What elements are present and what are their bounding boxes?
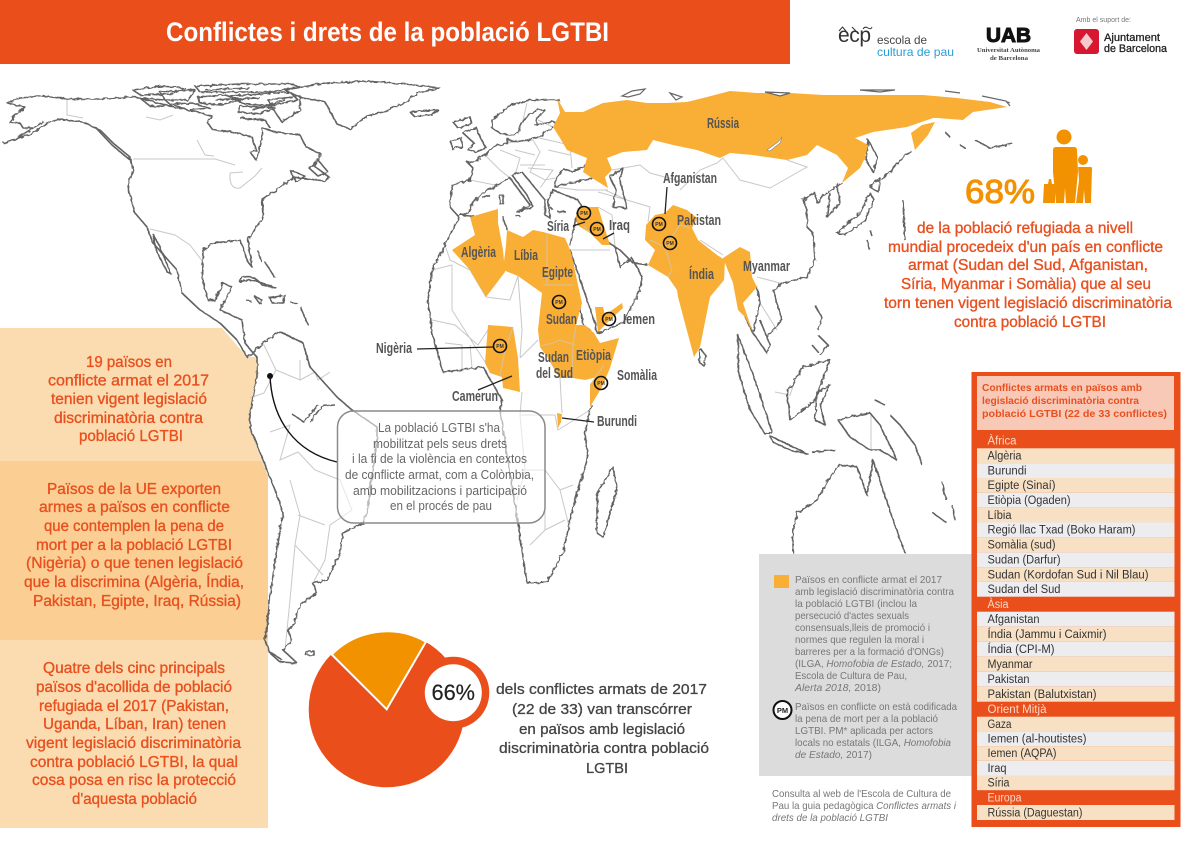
Greenland <box>285 81 440 129</box>
country labels: Sudan <box>546 312 577 328</box>
panel: conflicts table <box>972 372 1180 827</box>
death penalty markers: PM <box>593 227 601 233</box>
table section: Asia: Afganistan <box>988 614 1040 626</box>
legend text: death penalty: Països en conflicte on està codificada <box>795 701 957 713</box>
country: Myanmar <box>723 247 757 333</box>
Pacific coast islands <box>96 128 264 215</box>
panel: 19 countries <box>0 328 262 461</box>
Madagascar <box>597 467 617 537</box>
table section: Europe: Rússia (Daguestan) <box>988 808 1083 820</box>
logo: UAB: Universitat Autònoma <box>977 47 1041 54</box>
logo: UAB <box>977 25 1041 62</box>
legend text: death penalty: locals no estatals (ILGA, Homofobia <box>795 737 951 749</box>
legend <box>759 554 972 776</box>
panel: EU arms exports: armes a països en conflicte <box>39 499 230 516</box>
Caribbean islands <box>240 251 308 325</box>
stat: 68% refugees: Síria, Myanmar i Somàlia) que al seu <box>901 276 1151 293</box>
country labels: Camerun <box>452 389 498 405</box>
legend swatch: conflict countries <box>774 575 789 588</box>
panel: refugee host countries: països d'acollida de població <box>36 679 232 696</box>
country labels: Afganistan <box>663 171 717 187</box>
stat: 68% refugees: 68% <box>965 173 1035 210</box>
country labels: Nigèria <box>376 341 413 357</box>
country: Yemen <box>595 303 623 332</box>
country: Syria and Iraq <box>576 207 610 245</box>
text: share of armed conflicts: dels conflictes armats de 2017 <box>496 681 707 698</box>
country: Libya, Egypt, Sudan, South Sudan, Ethiopia, Somalia <box>503 230 619 407</box>
table section: Africa: Sudan (Kordofan Sud i Nil Blau) <box>988 569 1149 581</box>
country labels: Iraq <box>609 218 630 234</box>
Borneo <box>787 360 830 420</box>
table heading: legislació discriminatòria contra <box>982 395 1139 407</box>
panel: 19 countries: tenien vigent legislació <box>51 391 207 408</box>
stat: 68% refugees: mundial procedeix d'un país en conflicte <box>888 239 1163 256</box>
Asia east coast <box>742 183 842 353</box>
panel: EU arms exports: que la discrimina (Algèria, Índia, <box>24 574 244 591</box>
stat: 68% refugees: de la població refugiada a nivell <box>917 220 1133 237</box>
table heading: Conflictes armats en països amb <box>982 382 1142 394</box>
Pacific islands <box>875 400 955 523</box>
Lake Baikal <box>767 137 782 151</box>
panel: 19 countries: conflicte armat el 2017 <box>48 372 209 390</box>
country labels: Líbia <box>514 248 539 264</box>
table section: Middle East <box>977 704 1174 790</box>
country labels: Etiòpia <box>576 348 612 364</box>
legend text: conflict countries: normes que regulen la moral i <box>795 634 924 646</box>
Philippines <box>812 305 828 355</box>
logo: Escola de Cultura de Pau: escola de <box>877 33 927 47</box>
legend icon: PM: PM <box>777 706 788 715</box>
text: share of armed conflicts: LGTBI <box>586 760 628 777</box>
table section: Africa: Etiòpia (Ogaden) <box>988 495 1071 507</box>
table heading <box>977 376 1174 430</box>
Iceland <box>453 117 472 128</box>
callout: LGTBI mobilisation: amb mobilitzacions i participació <box>353 484 527 498</box>
Russian Arctic islands <box>622 89 1010 106</box>
panel: refugee host countries: refugiada el 2017 (Pakistan, <box>39 698 229 715</box>
table section: Asia: Myanmar <box>988 659 1033 671</box>
table section: Europe <box>977 792 1174 820</box>
legend text: conflict countries: consensuals,lleis de promoció i <box>795 622 930 634</box>
table section: Africa: Egipte (Sinaí) <box>988 480 1056 492</box>
map coastlines <box>4 81 1012 663</box>
panel: refugee host countries: Uganda, Líban, Iran) tenen <box>43 716 226 733</box>
table section: Africa: Àfrica <box>988 434 1017 448</box>
table section: Asia: Pakistan (Balutxistan) <box>988 689 1097 701</box>
callout: LGTBI mobilisation <box>338 411 545 523</box>
New Guinea <box>838 413 897 460</box>
Sumatra <box>738 335 772 434</box>
panel: EU arms exports <box>0 461 268 640</box>
Japan and Sakhalin <box>837 140 880 235</box>
Australia <box>792 460 905 553</box>
table section: Africa <box>977 434 1174 597</box>
death penalty markers: PM <box>666 241 674 247</box>
logo: Ajuntament de Barcelona <box>1074 17 1168 55</box>
logo: UAB: UAB <box>986 25 1031 47</box>
text: pedagogical guide note <box>772 788 957 824</box>
legend text: death penalty <box>795 701 957 761</box>
table section: Africa: Somàlia (sud) <box>988 540 1056 552</box>
Africa <box>428 215 598 583</box>
country labels: del Sud <box>536 366 573 382</box>
icon: refugee family <box>1043 130 1092 203</box>
country labels: Burundi <box>597 414 637 430</box>
death penalty markers: PM <box>655 222 663 228</box>
country labels: Iemen <box>623 312 655 328</box>
country labels: Egipte <box>542 265 573 281</box>
Baja California <box>153 234 171 274</box>
Newfoundland and east coast islands <box>290 160 328 182</box>
logo: Escola de Cultura de Pau <box>838 24 954 59</box>
panel: refugee host countries: contra població LGTBI, la qual <box>30 754 238 771</box>
Caspian Sea <box>610 168 627 208</box>
logo: Escola de Cultura de Pau: cultura de pau <box>877 45 954 59</box>
Mediterranean islands <box>483 195 566 216</box>
Black Sea <box>555 165 592 187</box>
table section: Africa: Líbia <box>988 510 1012 522</box>
pie chart: 66% <box>309 631 489 787</box>
logo: Ajuntament de Barcelona: de Barcelona <box>1104 43 1168 55</box>
country: Afghanistan, Pakistan, India <box>645 205 725 357</box>
Falkland islands <box>306 651 314 655</box>
country labels: Rússia <box>707 116 740 132</box>
table section: Middle East: Iemen (AQPA) <box>988 748 1057 760</box>
table section: Middle East: Orient Mitjà <box>988 704 1047 716</box>
panel: refugee host countries <box>0 640 268 828</box>
British Isles <box>451 127 486 152</box>
internal borders <box>500 225 690 385</box>
header banner <box>0 0 790 64</box>
country: Russia, Kamchatka <box>911 122 935 150</box>
stat: 68% refugees: contra població LGTBI <box>954 314 1106 331</box>
legend text: conflict countries: Països en conflicte armat el 2017 <box>795 574 942 586</box>
world map <box>4 81 1012 663</box>
table section: Middle East: Iraq <box>988 763 1006 775</box>
logo: Ajuntament de Barcelona: Ajuntament <box>1104 32 1160 44</box>
Sri Lanka <box>699 348 706 366</box>
table section: Asia <box>977 598 1174 702</box>
North America <box>4 96 329 357</box>
table section: Middle East: Gaza <box>988 719 1012 731</box>
country labels: Myanmar <box>743 259 790 275</box>
legend text: death penalty: LGTBI. PM* aplicada per actors <box>795 725 933 737</box>
text: share of armed conflicts: discriminatòria contra població <box>499 740 709 757</box>
legend text: conflict countries: amb legislació discriminatòria contra <box>795 586 954 598</box>
table section: Middle East: Iemen (al-houtistes) <box>988 734 1087 746</box>
death penalty markers: PM <box>580 211 588 217</box>
legend text: conflict countries: Escola de Cultura de Pau, <box>795 670 907 682</box>
map leader lines <box>417 187 667 422</box>
text: pedagogical guide note: Consulta al web de l'Escola de Cultura de <box>772 788 951 800</box>
table section: Europe: Europa <box>988 792 1022 804</box>
table section: Africa: Sudan (Darfur) <box>988 554 1061 566</box>
death penalty markers: PM <box>605 317 613 323</box>
stat: 68% refugees: torn tenen vigent legislació discriminatòria <box>884 295 1172 312</box>
legend text: conflict countries: persecució d'actes sexuals <box>795 610 909 622</box>
legend text: conflict countries <box>794 574 954 694</box>
panel: EU arms exports: Països de la UE exporten <box>47 481 221 498</box>
panel: 19 countries: discriminatòria contra <box>54 410 203 427</box>
panel: refugee host countries: vigent legislació discriminatòria <box>26 735 241 752</box>
legend text: conflict countries: (ILGA, Homofobia de Estado, 2017; <box>795 658 952 670</box>
country labels: Síria <box>547 219 570 235</box>
death penalty markers <box>494 206 676 390</box>
stat: 68% refugees <box>884 130 1172 331</box>
panel: EU arms exports: mort per a la població LGTBI <box>36 537 232 554</box>
Sulawesi <box>815 385 830 425</box>
country: Algeria <box>452 209 505 297</box>
country labels: Algèria <box>461 245 497 261</box>
table section: Middle East: Síria <box>988 778 1010 790</box>
arrow: Colombia pointer <box>267 373 337 462</box>
country: Burundi <box>557 413 562 428</box>
legend icon: PM <box>774 701 792 719</box>
panel: EU arms exports: Pakistan, Egipte, Iraq, Rússia) <box>33 593 241 610</box>
legend text: conflict countries: la població LGTBI (inclou la <box>795 598 917 610</box>
death penalty markers: PM <box>555 300 563 306</box>
death penalty markers: PM <box>496 344 504 350</box>
panel: 19 countries: 19 països en <box>86 354 172 371</box>
title: Conflictes i drets de la població LGTBI <box>166 17 609 47</box>
highlighted countries <box>452 89 1010 428</box>
country labels: Somàlia <box>617 368 658 384</box>
Europe <box>450 100 581 246</box>
callout: LGTBI mobilisation: La població LGTBI s'ha <box>378 421 500 435</box>
table section: Asia: Índia (CPI-M) <box>988 643 1055 656</box>
text: pedagogical guide note: Pau la guia pedagògica Conflictes armats i <box>772 800 957 812</box>
logo: Ajuntament de Barcelona: Amb el suport de: <box>1076 17 1131 24</box>
South America <box>250 332 377 663</box>
table section: Africa: Regió llac Txad (Boko Haram) <box>988 525 1136 537</box>
logo: Escola de Cultura de Pau: ecp <box>838 24 871 47</box>
callout: LGTBI mobilisation: i la fi de la violència en contextos <box>352 452 527 466</box>
country labels: Sudan <box>538 350 569 366</box>
death penalty markers: PM <box>597 381 605 387</box>
panel: EU arms exports: que contemplen la pena de <box>44 518 224 535</box>
legend text: conflict countries: Alerta 2018, 2018) <box>794 682 881 694</box>
text: share of armed conflicts: en països amb legislació <box>519 721 685 738</box>
map borders <box>67 99 871 650</box>
table section: Asia: Pakistan <box>988 674 1030 686</box>
table heading: població LGTBI (22 de 33 conflictes) <box>982 408 1167 420</box>
text: share of armed conflicts <box>496 681 709 777</box>
table section: Africa: Burundi <box>988 465 1026 477</box>
country: Russia <box>553 91 1007 188</box>
panel: EU arms exports: (Nigèria) o que tenen legislació <box>26 555 243 572</box>
text: pedagogical guide note: drets de la població LGTBI <box>772 812 888 824</box>
Arctic islands <box>133 84 300 128</box>
legend text: death penalty: de Estado, 2017) <box>795 749 872 761</box>
table section: Asia: Índia (Jammu i Caixmir) <box>988 628 1107 641</box>
Java and Lesser Sunda <box>770 436 835 454</box>
country labels <box>376 116 790 430</box>
callout: LGTBI mobilisation: mobilitzat pels seus drets <box>373 437 507 451</box>
table section: Asia: Àsia <box>988 598 1009 611</box>
stat: 68% refugees: armat (Sudan del Sud, Afganistan, <box>908 257 1148 274</box>
logo: UAB: de Barcelona <box>990 55 1029 62</box>
country labels: Índia <box>689 266 715 283</box>
country labels: Pakistan <box>677 213 721 229</box>
legend text: death penalty: la pena de mort per a la població <box>795 713 938 725</box>
callout: LGTBI mobilisation: de conflicte armat, com a Colòmbia, <box>345 468 534 482</box>
country: Nigeria and Cameroon <box>485 325 520 392</box>
pie chart: 66%: 66% <box>432 680 475 705</box>
panel: refugee host countries: cosa posa en risc la protecció <box>32 772 236 789</box>
table section: Africa: Sudan del Sud <box>988 584 1060 596</box>
legend text: conflict countries: barreres per a la formació d'ONGs) <box>795 646 944 658</box>
Kuril and Aleutian arcs <box>867 100 1012 250</box>
panel: 19 countries: població LGTBI <box>79 428 183 445</box>
Arabian Peninsula <box>570 240 648 333</box>
text: share of armed conflicts: (22 de 33) van transcórrer <box>512 701 692 718</box>
table section: Africa: Algèria <box>988 450 1022 462</box>
callout: LGTBI mobilisation: en el procés de pau <box>390 499 492 513</box>
panel: refugee host countries: Quatre dels cinc principals <box>43 660 225 677</box>
panel: refugee host countries: d'aquesta població <box>72 791 197 808</box>
